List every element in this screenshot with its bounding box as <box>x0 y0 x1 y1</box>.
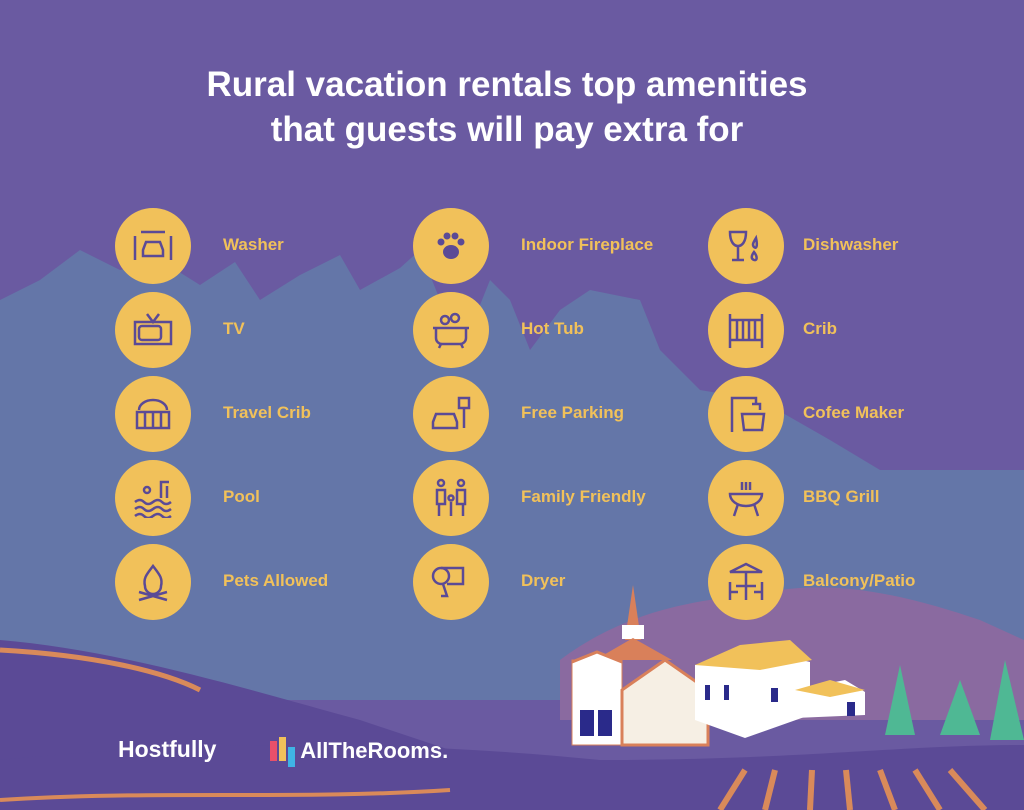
item: Free Parking <box>413 376 624 452</box>
item: Balcony/Patio: Balcony/Patio <box>803 571 915 590</box>
item: Balcony/Patio <box>708 544 915 620</box>
item: TV: TV <box>223 319 245 338</box>
item: Family Friendly <box>413 460 646 536</box>
item: BBQ Grill: BBQ Grill <box>803 487 880 506</box>
item: Travel Crib: Travel Crib <box>223 403 311 422</box>
item: Crib <box>708 292 837 368</box>
item: Travel Crib <box>115 376 311 452</box>
item: TV <box>115 292 245 368</box>
item: Family Friendly: Family Friendly <box>521 487 646 506</box>
logo: Hostfully: Hostfully <box>118 736 216 762</box>
logo: AllTheRooms: AllTheRooms. <box>300 738 448 763</box>
item: Dishwasher: Dishwasher <box>803 235 898 254</box>
item: Washer <box>115 208 284 284</box>
title: Rural vacation rentals top amenities <box>206 65 808 104</box>
item: Cofee Maker <box>708 376 904 452</box>
item: BBQ Grill <box>708 460 880 536</box>
title: that guests will pay extra for <box>271 110 743 149</box>
item: Indoor Fireplace: Indoor Fireplace <box>521 235 653 254</box>
item: Pool <box>115 460 260 536</box>
item: Free Parking: Free Parking <box>521 403 624 422</box>
item: Pets Allowed <box>115 544 328 620</box>
item: Hot Tub: Hot Tub <box>521 319 584 338</box>
buildings <box>572 585 865 745</box>
title <box>206 65 808 149</box>
trees <box>885 660 1024 740</box>
logo: AllTheRooms <box>270 737 448 767</box>
item: Pets Allowed: Pets Allowed <box>223 571 328 590</box>
item: Hot Tub <box>413 292 584 368</box>
item: Dishwasher <box>708 208 898 284</box>
item: Cofee Maker: Cofee Maker <box>803 403 904 422</box>
item: Washer: Washer <box>223 235 284 254</box>
item: Dryer: Dryer <box>521 571 565 590</box>
item: Indoor Fireplace <box>413 208 653 284</box>
item: Dryer <box>413 544 566 620</box>
item: Crib: Crib <box>803 319 837 338</box>
item: Pool: Pool <box>223 487 260 506</box>
